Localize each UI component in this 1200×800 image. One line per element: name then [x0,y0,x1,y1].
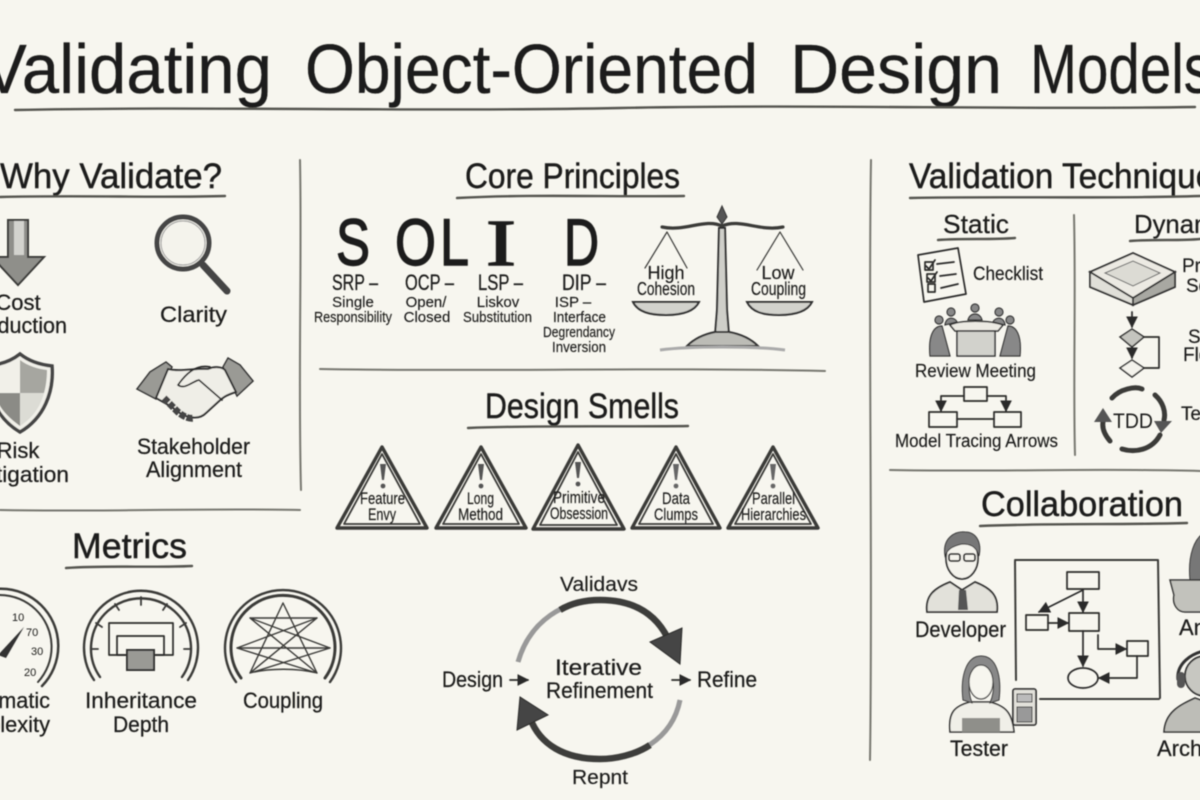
label: checklist: Checklist [973,264,1044,285]
label: low coupling: Low [761,263,796,283]
icon: prototype box [1090,253,1175,305]
solid: srp: Responsibility [314,309,392,326]
gauge: cyclomatic complexity [0,589,58,686]
panel: collaboration [915,485,1200,761]
smell: parallel hierarchies: Hierarchies [741,505,806,524]
icon: tdd cycle [1094,388,1172,451]
solid: dip: Interface [553,309,606,326]
solid: ocp [404,270,455,326]
heading: collaboration: Collaboration [981,485,1183,524]
icon: checklist [918,248,966,302]
gauge: cyclomatic complexity: 30 [31,646,43,658]
solid: lsp: Liskov [477,294,520,311]
label: low coupling [751,263,806,299]
label: iterative refinement [546,655,653,703]
title [0,30,1200,110]
smell: parallel hierarchies: Parallel [752,489,795,508]
label: inheritance depth: Depth [113,712,169,737]
label: high cohesion: High [647,263,685,283]
solid: srp: SRP – [332,270,379,295]
smell: long method: Long [467,489,494,508]
smell: long method [436,447,526,528]
smell: primitive obsession: Obsession [550,504,608,523]
arrow: top arc [518,600,682,664]
solid: dip: Inversion [552,339,606,356]
label: tester: Tester [950,736,1008,761]
icon: model tracing arrows [929,387,1021,427]
icon: tdd cycle: TDD [1113,410,1153,433]
panel: design smells [337,387,818,529]
icon: down arrow [0,220,44,285]
label: low coupling: Coupling [751,279,806,299]
label: validate: Validavs [560,574,638,596]
label: stakeholder alignment: Alignment [146,457,242,482]
solid: lsp: Substitution [463,309,532,326]
solid letters: L [440,205,469,279]
title: Design [790,30,1002,108]
smell: primitive obsession: Primitive [553,488,605,507]
heading: core principles: Core Principles [465,157,680,196]
icon: review meeting [930,304,1020,356]
smell: data clumps: Clumps [654,505,698,524]
solid: ocp: OCP – [405,270,455,295]
title: Object-Oriented [305,30,758,108]
heading: metrics: Metrics [72,527,187,566]
label: prototype scenario [1182,256,1200,297]
label: clarity: Clarity [160,302,227,327]
heading: why validate: Why Validate? [0,157,222,196]
solid: dip: Degrendancy [543,324,615,341]
diagram: whiteboard [1015,560,1160,699]
gauge: coupling [225,590,341,682]
person: developer [927,532,997,612]
label: high cohesion: Cohesion [637,279,695,299]
heading: design smells: Design Smells [485,387,679,426]
gauge: cyclomatic complexity: 20 [24,667,36,679]
label: stakeholder alignment: Stakeholder [137,434,250,459]
person: tester [950,656,1036,732]
label: developer: Developer [915,617,1006,642]
solid letters [336,205,599,280]
label: inheritance depth [85,688,197,737]
smell: feature envy: Envy [368,505,396,524]
label: design: Design [442,667,503,692]
icon: shield [0,354,52,432]
icon: handshake [137,358,253,418]
smell: feature envy: Feature [360,489,405,508]
subheading: static: Static [943,209,1009,239]
smell: long method: Method [458,505,503,524]
solid: srp [314,270,392,326]
label: repeat: Repnt [572,767,628,789]
person: architect [1164,650,1200,732]
solid: dip [543,270,615,356]
smell: primitive obsession [533,445,624,529]
smell: feature envy [337,447,427,528]
label: stakeholder alignment [137,434,250,482]
label: review meeting: Review Meeting [915,361,1036,381]
label: refine: Refine [697,667,757,692]
panel: metrics [0,527,341,737]
panel: validation techniques [895,157,1200,451]
solid: dip: ISP – [555,294,592,311]
icon: flow diagram [1120,312,1159,377]
person: analyst [1170,530,1200,612]
smell: data clumps: Data [662,489,690,508]
solid: ocp: Closed [404,309,450,326]
solid: srp: Single [332,294,374,311]
icon: magnifier [157,217,227,291]
solid letters: S [336,205,370,279]
solid: dip: DIP – [562,270,607,295]
label: sequence flow [1183,327,1200,366]
label: coupling: Coupling [243,688,323,713]
gauge: cyclomatic complexity: 10 [12,612,24,624]
solid: lsp [463,270,532,326]
smell: parallel hierarchies [728,447,818,528]
label: high cohesion [637,263,695,299]
label: model tracing arrows: Model Tracing Arrows [895,431,1058,451]
gauge: cyclomatic complexity: 70 [26,627,38,639]
panel: iterative refinement cycle [442,574,757,789]
label: iterative refinement: Refinement [546,678,653,703]
panel: why validate [0,157,253,487]
label: inheritance depth: Inheritance [85,688,197,713]
solid: lsp: LSP – [478,270,524,295]
solid letters: O [395,205,436,279]
icon: balance scale [633,206,812,350]
label: iterative refinement: Iterative [555,655,642,680]
solid letters: I [486,207,516,280]
panel: core principles [314,157,812,356]
label: refine [672,667,757,692]
label: cost reduction [0,290,67,338]
arrow: bottom arc [517,697,680,759]
solid: ocp: Open/ [406,294,447,311]
smell: data clumps [632,447,720,528]
label: risk mitigation [0,438,69,487]
solid letters: D [564,205,599,279]
label: cyclomatic complexity [0,688,50,737]
gauge: inheritance depth [84,591,198,680]
